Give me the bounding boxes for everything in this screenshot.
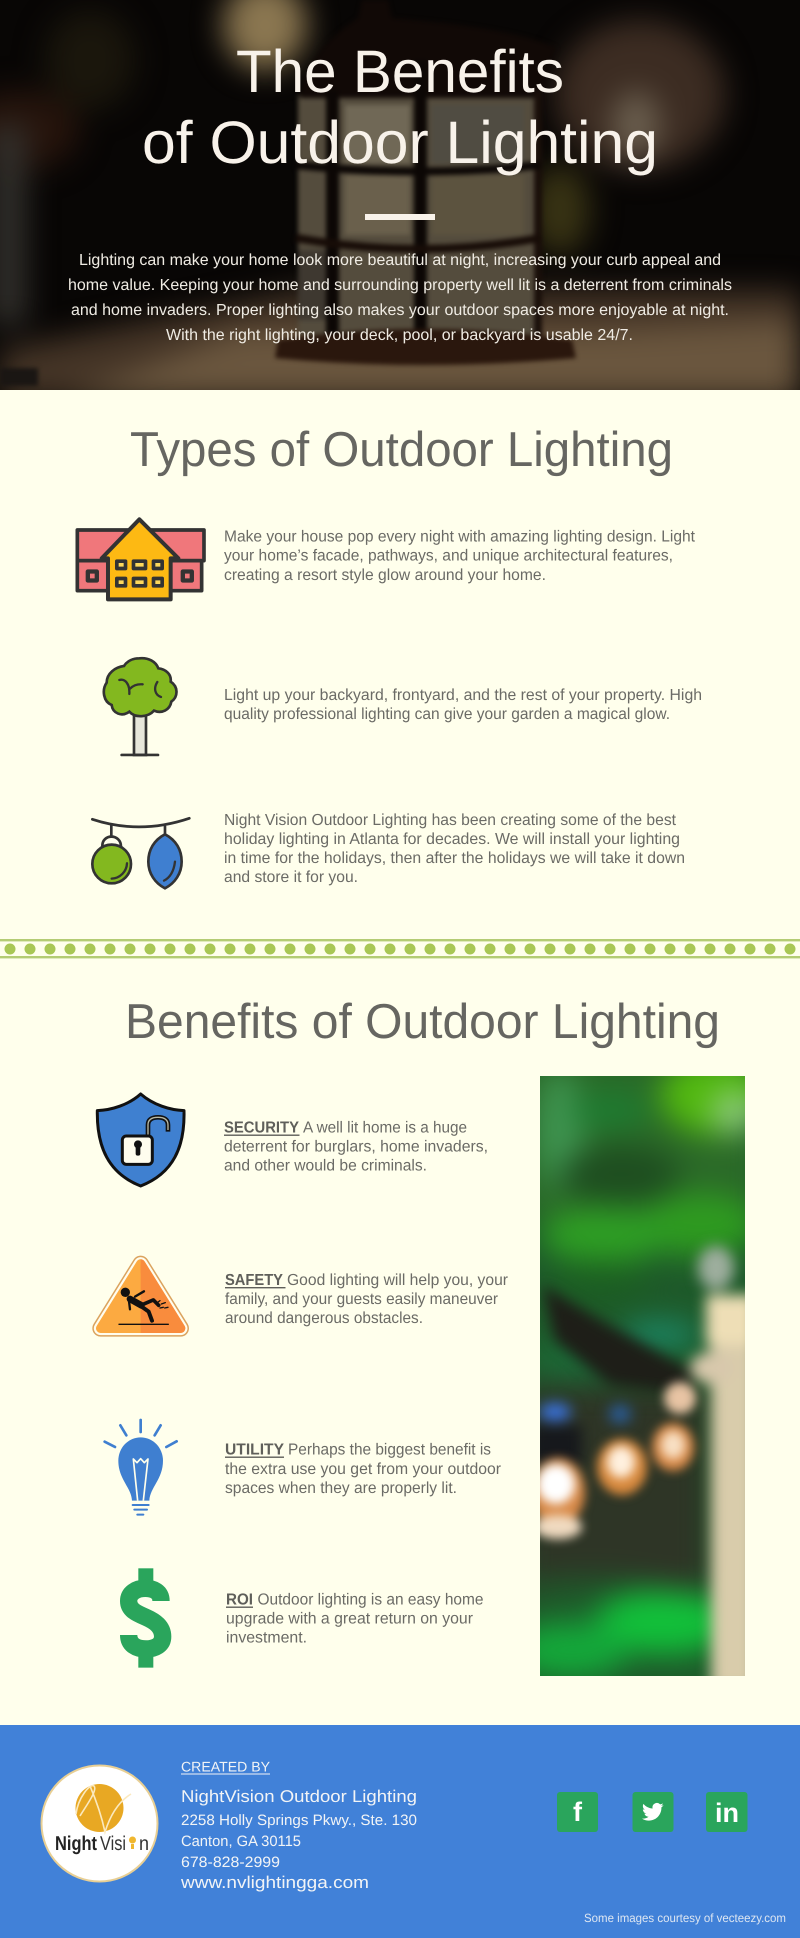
text: utility: Perhaps the biggest benefit is: [288, 1442, 491, 1458]
text: house lighting: Make your house pop every night with amazing lighting design. Light: [224, 528, 696, 546]
text: roi: Outdoor lighting is an easy home: [258, 1592, 484, 1608]
icon: house: [77, 519, 204, 599]
text: safety: family, and your guests easily maneuver: [225, 1291, 499, 1308]
icon: holiday bulbs: [92, 818, 189, 888]
logo: Night Vision: n: [139, 1833, 149, 1855]
text: house lighting: creating a resort style glow around your home.: [224, 567, 546, 584]
text: safety: [225, 1272, 509, 1327]
panel: benefits of outdoor lighting: [97, 995, 770, 1690]
lantern glass: [298, 95, 536, 335]
text: holiday lighting: holiday lighting in Atlanta for decades. We will install your lighting: [224, 831, 680, 848]
text: holiday lighting: and store it for you.: [224, 869, 358, 886]
text: utility: the extra use you get from your outdoor: [225, 1461, 502, 1478]
text: house lighting: your home’s facade, pathways, and unique architectural features,: [224, 548, 673, 564]
company details: Canton, GA 30115: [181, 1833, 301, 1850]
title: [142, 38, 658, 176]
icon: security shield: [97, 1094, 184, 1186]
panel: types of outdoor lighting: [77, 423, 702, 888]
logo: Night Vision: [42, 1766, 158, 1882]
text: roi: [226, 1592, 484, 1646]
intro paragraph: [68, 252, 732, 344]
text: security: [224, 1120, 488, 1174]
dotted divider: [0, 939, 800, 958]
company details: www.nvlightingga.com: [180, 1873, 369, 1892]
text: safety: around dangerous obstacles.: [225, 1310, 423, 1327]
logo: Night Vision: Night: [55, 1833, 97, 1855]
title: The Benefits: [236, 38, 564, 105]
text: utility: spaces when they are properly lit.: [225, 1480, 457, 1497]
icon: dollar sign: [129, 1568, 163, 1668]
icon: facebook: [557, 1792, 598, 1832]
company details: [180, 1758, 417, 1892]
company details: CREATED BY: [181, 1758, 271, 1774]
photo: blurred string lights: [540, 1076, 745, 1676]
text: roi: ROI: [226, 1592, 253, 1608]
text: utility: UTILITY: [225, 1442, 284, 1458]
text: security: SECURITY: [224, 1120, 299, 1136]
text: utility: [225, 1442, 502, 1497]
text: holiday lighting: [224, 812, 685, 886]
icon: safety warning triangle: [101, 1264, 181, 1328]
text: holiday lighting: in time for the holidays, then after the holidays we will take it down: [224, 850, 685, 867]
text: security: and other would be criminals.: [224, 1158, 427, 1174]
text: security: deterrent for burglars, home invaders,: [224, 1138, 488, 1156]
lantern cap: [300, 0, 556, 98]
text: garden lighting: Light up your backyard, frontyard, and the rest of your property. High: [224, 687, 702, 704]
hero background photo of lantern: [0, 0, 800, 400]
text: roi: upgrade with a great return on your: [226, 1610, 474, 1628]
text: roi: investment.: [226, 1630, 307, 1646]
icon: linkedin: [706, 1792, 748, 1832]
panel: hero header: [0, 0, 800, 400]
text: garden lighting: [224, 687, 702, 723]
lantern bars: [326, 90, 339, 340]
icon: facebook: f: [573, 1797, 583, 1827]
intro paragraph: Lighting can make your home look more beautiful at night, increasing your curb appeal and: [79, 252, 721, 269]
heading: types: Types of Outdoor Lighting: [130, 423, 673, 477]
text: house lighting: [224, 528, 696, 584]
text: holiday lighting: Night Vision Outdoor Lighting has been creating some of the best: [224, 812, 677, 829]
text: safety: SAFETY: [225, 1272, 283, 1289]
text: garden lighting: quality professional lighting can give your garden a magical glow.: [224, 706, 670, 723]
heading: benefits: Benefits of Outdoor Lighting: [125, 995, 720, 1049]
text: safety: Good lighting will help you, your: [287, 1272, 509, 1289]
company details: 678-828-2999: [181, 1854, 280, 1871]
lantern base: [275, 329, 576, 365]
intro paragraph: With the right lighting, your deck, pool, or backyard is usable 24/7.: [166, 327, 633, 344]
icon: tree: [104, 658, 176, 755]
company details: NightVision Outdoor Lighting: [181, 1787, 417, 1806]
icon: light bulb: [105, 1420, 177, 1515]
icon: twitter: [632, 1792, 674, 1832]
icon: linkedin: in: [715, 1798, 739, 1828]
title: of Outdoor Lighting: [142, 109, 658, 176]
intro paragraph: and home invaders. Proper lighting also makes your outdoor spaces more enjoyable at night.: [71, 302, 729, 319]
logo: Night Vision: Visi: [100, 1833, 126, 1855]
intro paragraph: home value. Keeping your home and surrounding property well lit is a deterrent from criminals: [68, 277, 732, 294]
image credit: Some images courtesy of vecteezy.com: [584, 1911, 786, 1925]
company details: 2258 Holly Springs Pkwy., Ste. 130: [181, 1812, 417, 1829]
panel: footer: [0, 1725, 800, 1938]
title divider: [365, 214, 435, 220]
text: security: A well lit home is a huge: [303, 1120, 467, 1136]
